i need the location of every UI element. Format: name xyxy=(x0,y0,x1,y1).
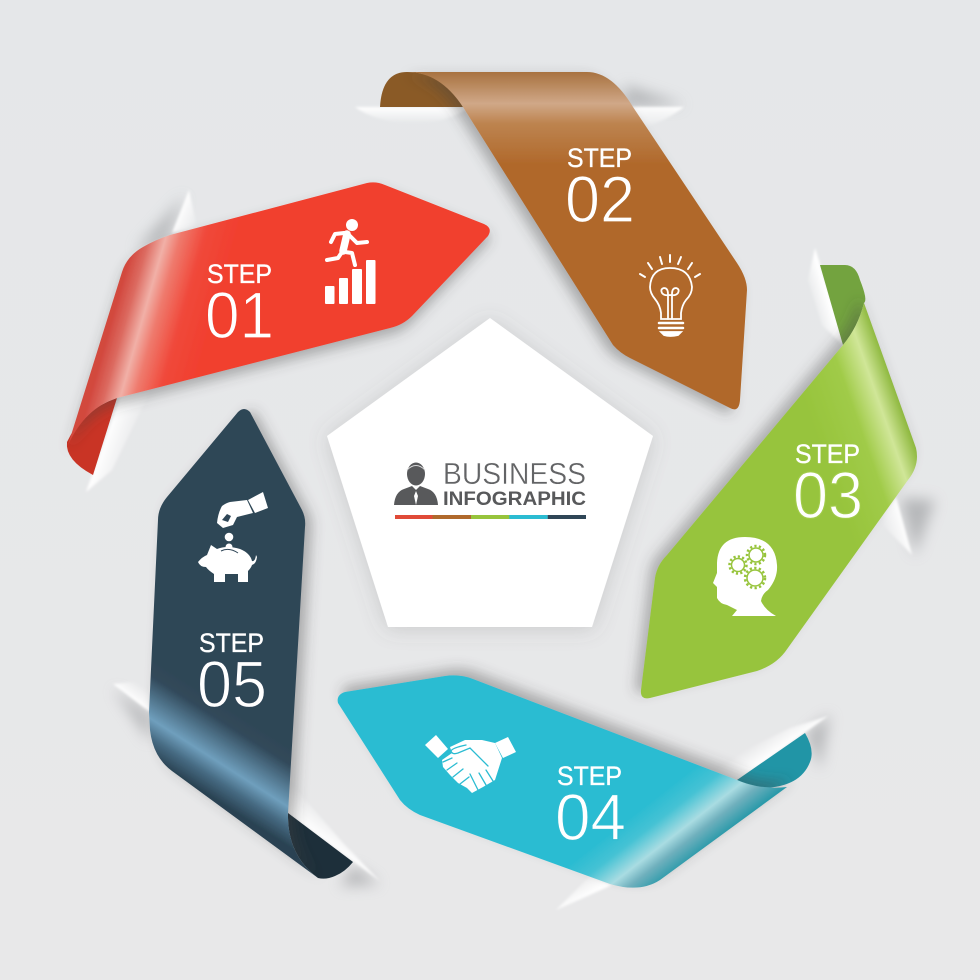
step 01 number: 01 xyxy=(205,278,274,352)
color bar xyxy=(395,515,586,519)
icon: hand and piggy bank xyxy=(198,492,268,582)
icon: head with gears xyxy=(713,537,777,616)
ribbon body xyxy=(68,182,490,445)
step 01 label: STEP xyxy=(207,259,272,289)
ribbon body xyxy=(641,303,917,698)
panel: center pentagon xyxy=(327,318,653,627)
panel: step 01 ribbon xyxy=(67,182,490,475)
icon: handshake xyxy=(425,735,516,793)
panel: step 05 ribbon xyxy=(149,409,353,879)
ribbon body xyxy=(149,409,318,878)
step 05 label: STEP xyxy=(199,628,264,658)
paper slits xyxy=(86,107,912,910)
step 04 label: STEP xyxy=(557,761,622,791)
ribbon body xyxy=(407,72,747,409)
ribbon underside xyxy=(737,733,812,788)
ribbon underside xyxy=(820,265,865,345)
icon: runner on bars xyxy=(325,219,376,304)
step 04 number: 04 xyxy=(555,780,626,854)
ribbon underside xyxy=(380,72,463,107)
icon: light bulb xyxy=(640,255,700,336)
ribbon underside xyxy=(67,398,117,475)
step 02 label: STEP xyxy=(567,143,632,173)
panel: step 02 ribbon xyxy=(380,72,747,409)
title: business: BUSINESS xyxy=(443,456,586,491)
panel: step 03 ribbon xyxy=(641,265,917,698)
panel: step 04 ribbon xyxy=(338,675,812,888)
paper cut shadows xyxy=(113,85,935,886)
step 03 number: 03 xyxy=(793,458,863,532)
title: infographic: INFOGRAPHIC xyxy=(443,488,586,510)
pentagon shape xyxy=(327,318,653,627)
ribbon body xyxy=(338,675,787,888)
icon: businessman xyxy=(394,462,438,505)
ribbon underside xyxy=(288,813,353,879)
step 02 number: 02 xyxy=(565,162,635,236)
step 03 label: STEP xyxy=(795,439,860,469)
step 05 number: 05 xyxy=(197,647,267,721)
